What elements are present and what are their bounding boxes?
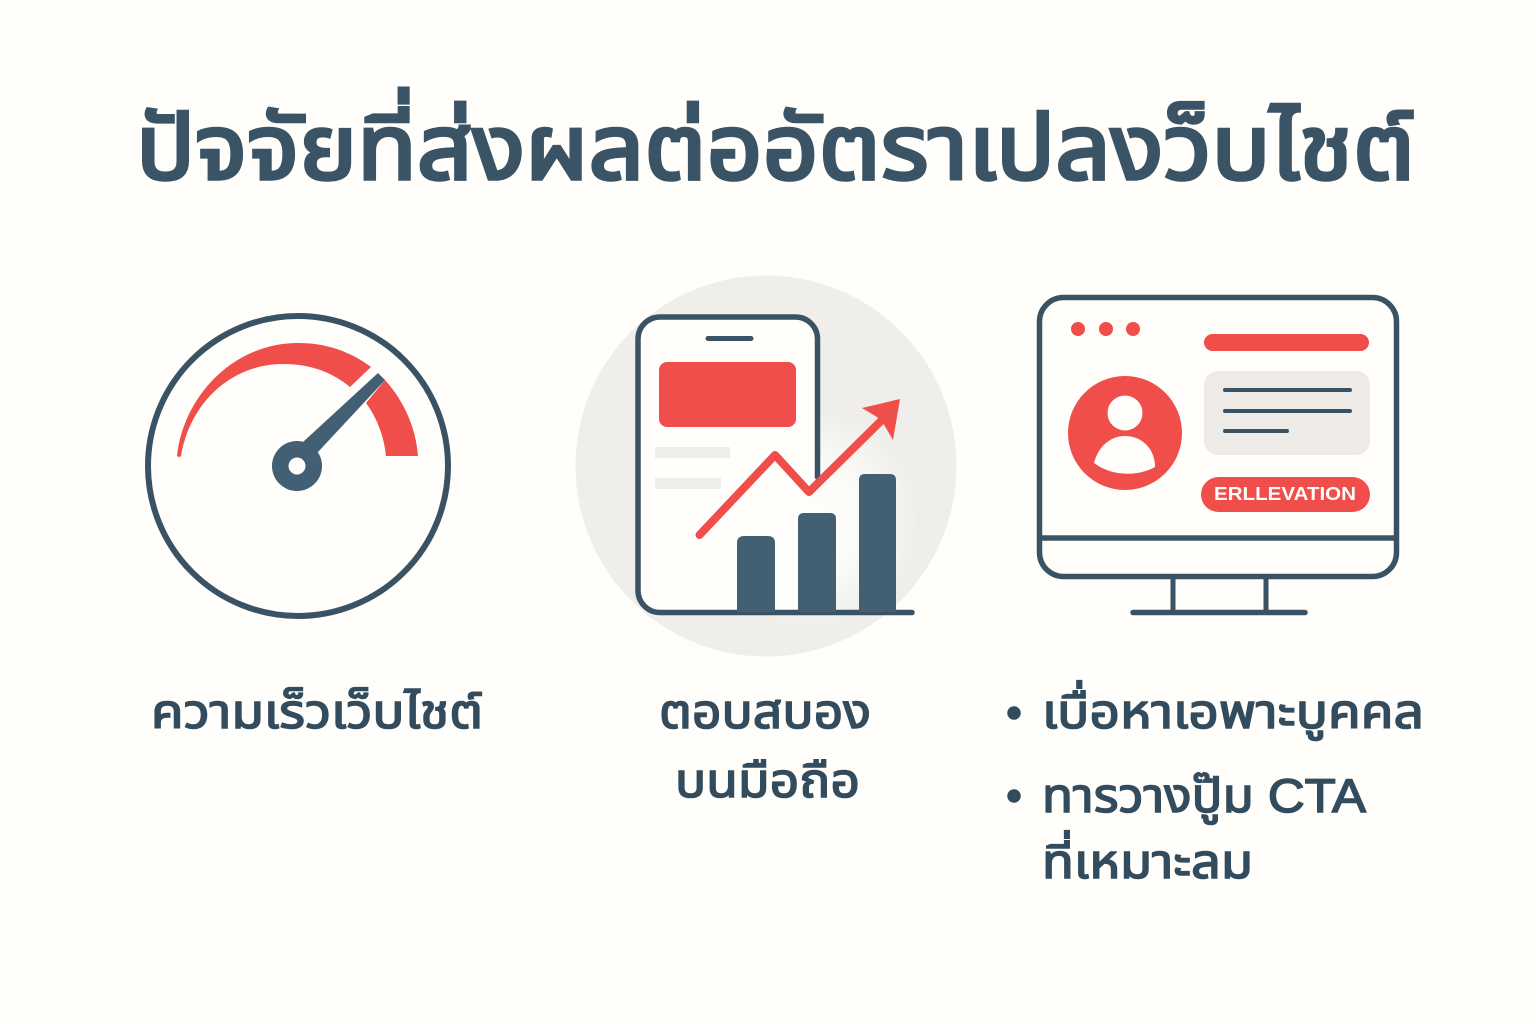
title: ปัจจัยที่ส่งผลต่ออัตราเปลงว็บไชต์	[136, 88, 1415, 199]
icon: mobile responsive growth	[576, 276, 956, 656]
call to action button	[1201, 477, 1370, 512]
bullet: CTA button placement	[1008, 769, 1367, 888]
icon: desktop monitor layout	[1040, 298, 1396, 612]
bullet: personalization: เบื่อหาเอพาะบูคคล	[1042, 680, 1424, 740]
bullet: CTA button placement: ทารวางปู๊ม CTA	[1042, 769, 1367, 824]
bullet: CTA button placement: ที่เหมาะลม	[1042, 830, 1253, 888]
icon: user avatar	[1068, 376, 1182, 490]
label: mobile responsive: ตอบสบอง	[659, 685, 871, 738]
call to action button: ERLLEVATION	[1214, 484, 1356, 504]
label: mobile responsive: บนมือถือ	[675, 754, 860, 807]
label: mobile responsive	[659, 685, 871, 807]
label: website speed: ความเร็วเว็บไชต์	[151, 685, 483, 738]
icon: speedometer gauge	[148, 316, 448, 616]
arrow: upward trend	[700, 399, 900, 535]
